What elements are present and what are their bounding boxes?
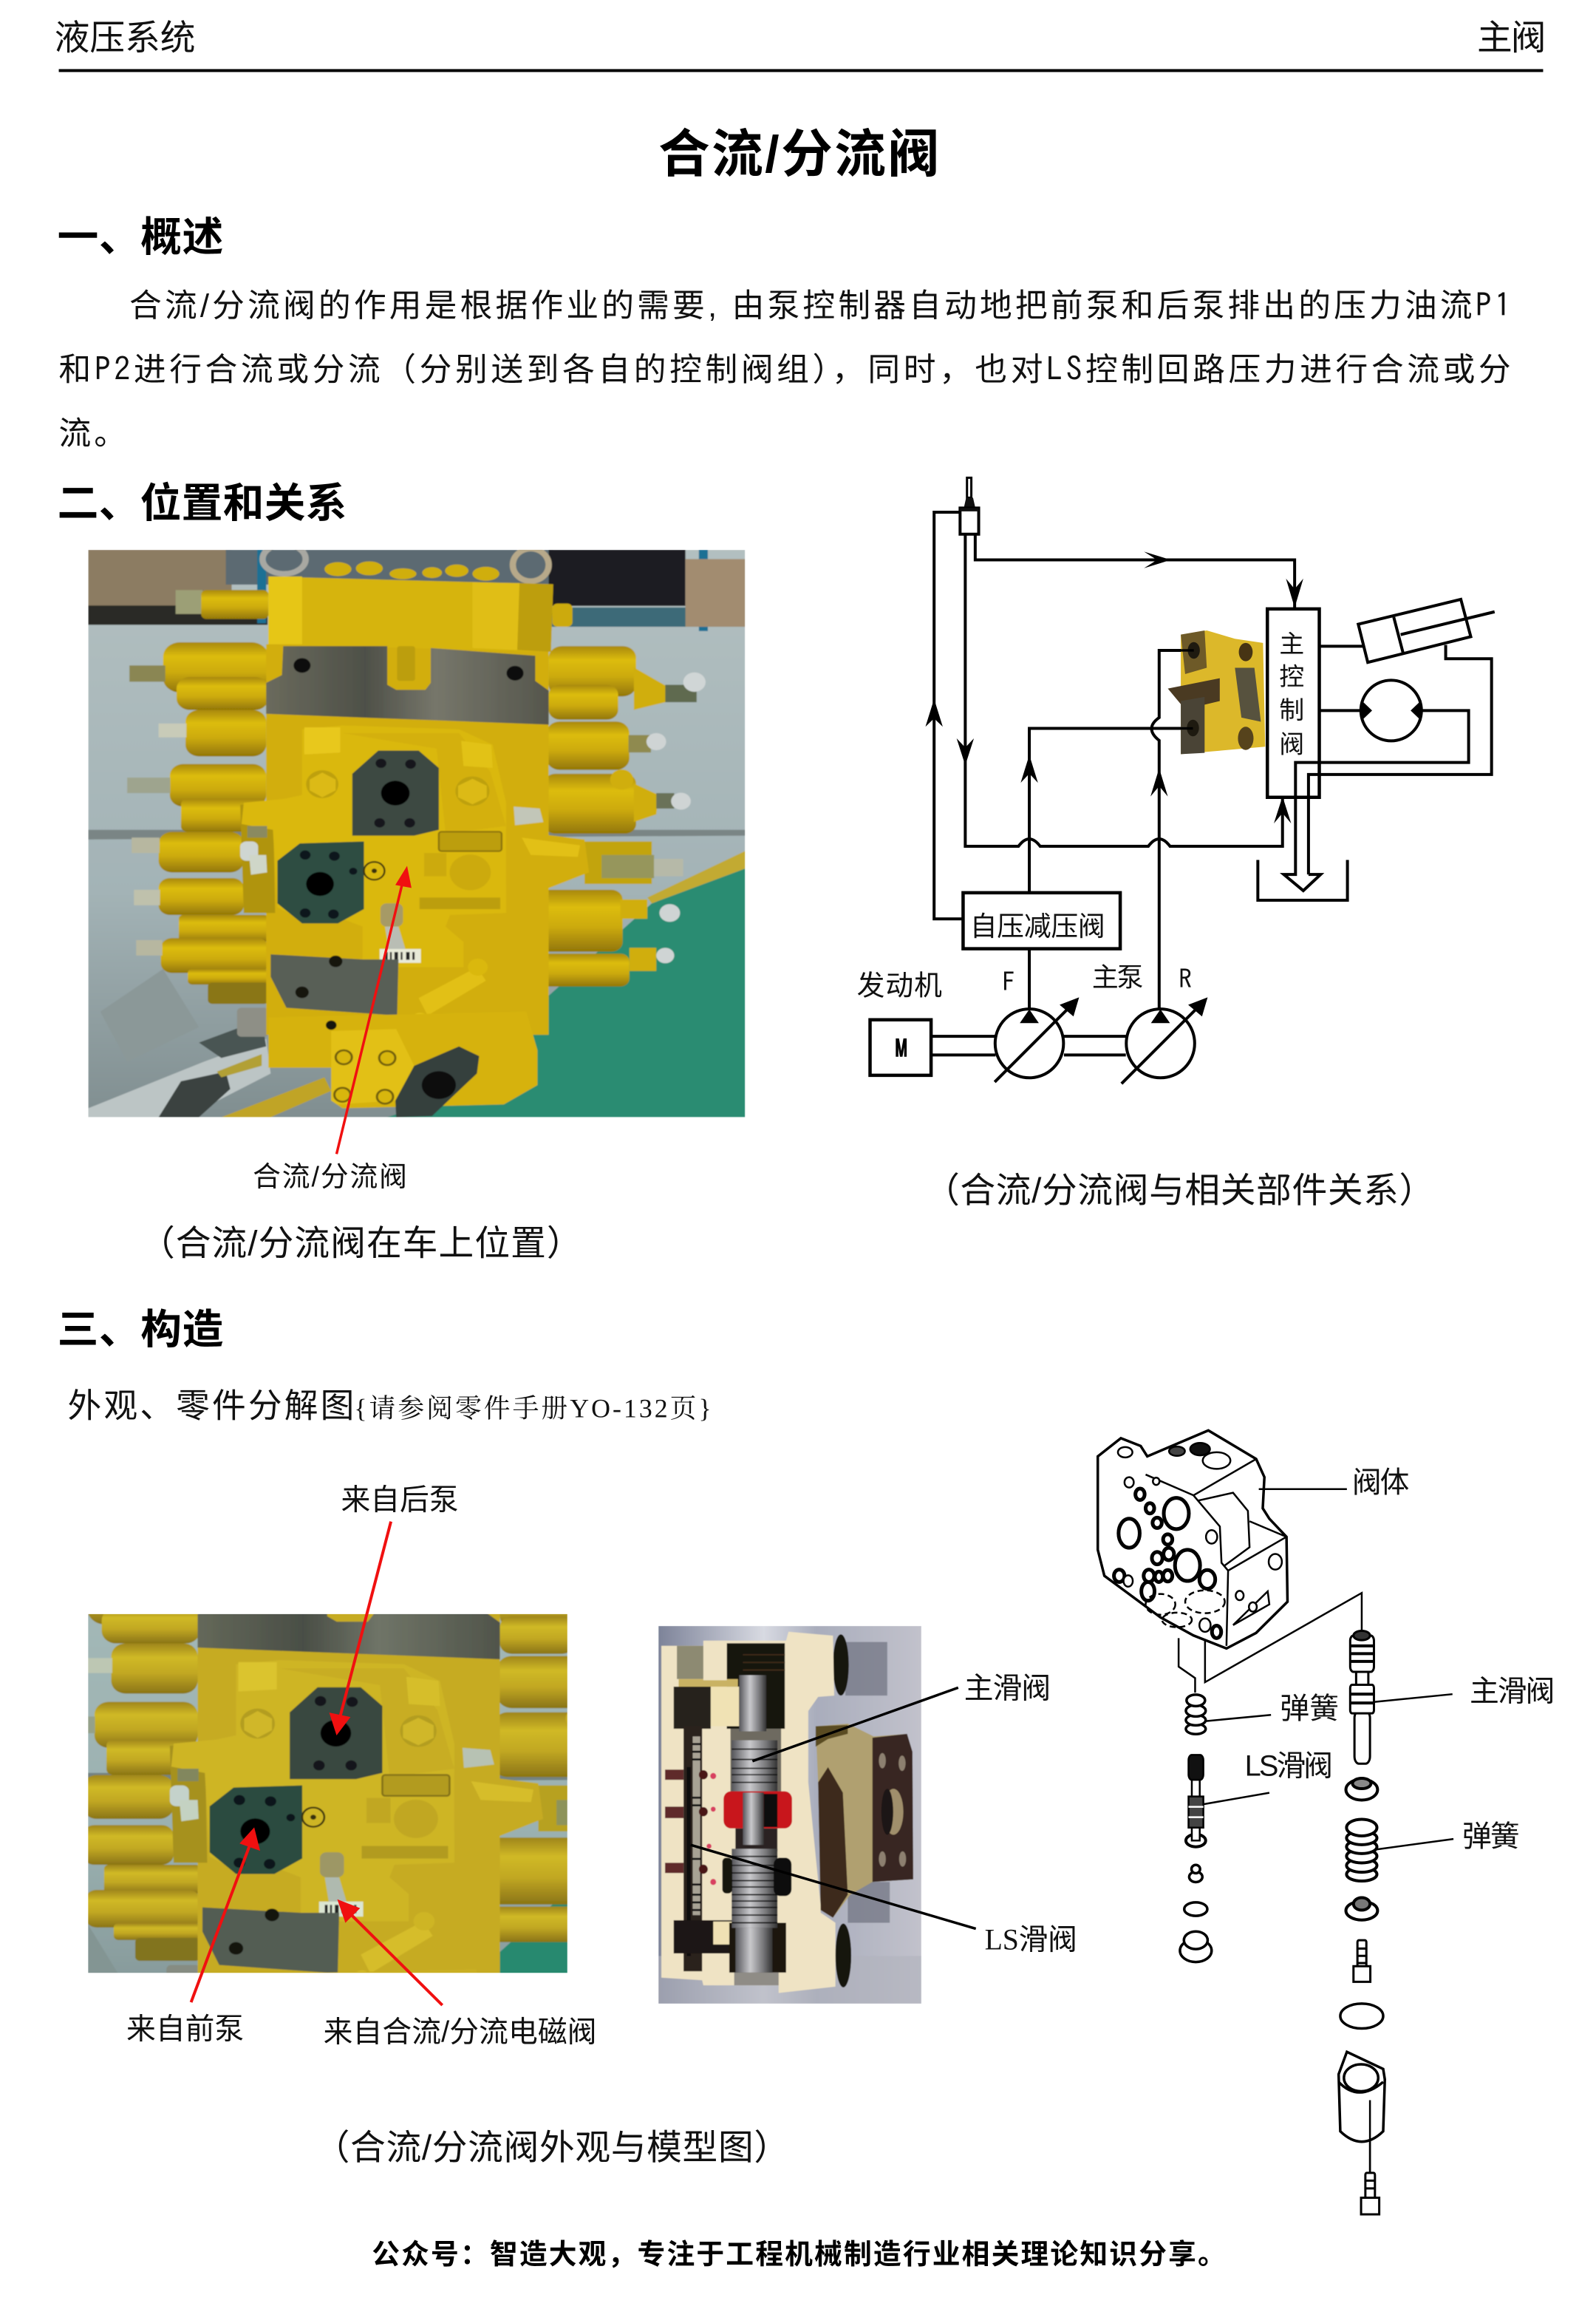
title: 合流/分流阀 <box>658 126 939 183</box>
icon: valve body <box>1098 1430 1287 1648</box>
text block: overview paragraph <box>59 288 1511 452</box>
labels: circuit diagram: 发动机 <box>857 971 942 1002</box>
part: LS spring <box>1186 1695 1206 1734</box>
exploded parts drawing <box>1098 1430 1453 2214</box>
icon: flow arrows <box>925 551 1303 823</box>
part: washers and main spring <box>1346 1778 1377 1920</box>
labels: circuit diagram <box>857 630 1304 1061</box>
leader lines: cutaway model <box>691 1687 976 1929</box>
part: LS spool <box>1186 1755 1206 1847</box>
page header <box>55 19 1546 72</box>
main control valve box <box>1267 609 1320 797</box>
heading: section three: 三、构造 <box>58 1307 223 1353</box>
footer note: 公众号：智造大观，专注于工程机械制造行业相关理论知识分享。 <box>372 2239 1226 2271</box>
text block: overview paragraph: 流。 <box>59 416 129 452</box>
icon: tank <box>1258 860 1348 900</box>
part: LS small fittings <box>1180 1865 1212 1962</box>
exploded axis lines <box>1179 1593 1370 2173</box>
caption: relation with components: （合流/分流阀与相关部件关系） <box>924 1171 1434 1211</box>
labels: circuit diagram: 制 <box>1279 697 1304 725</box>
labels: circuit diagram: R <box>1179 967 1192 993</box>
cavities <box>677 1646 703 1679</box>
labels: circuit diagram: 主泵 <box>1092 963 1143 993</box>
icon: joystick <box>960 477 979 534</box>
text block: overview paragraph: 和P2进行合流或分流（分别送到各自的控制阀组），同时，也对LS控制回路压力进行合流或分 <box>59 352 1511 388</box>
heading: section two: 二、位置和关系 <box>58 480 347 526</box>
arrow: red pointer to valve <box>336 866 412 1154</box>
part: end bolt <box>1361 2173 1380 2214</box>
labels: exploded parts: 主滑阀 <box>1470 1675 1555 1707</box>
label: valve name: 合流/分流阀 <box>253 1162 407 1193</box>
labels: exploded parts: 阀体 <box>1352 1466 1409 1499</box>
part: end cap <box>1339 2052 1385 2142</box>
labels: circuit diagram: 自压减压阀 <box>970 911 1105 942</box>
heading: section one: 一、概述 <box>58 214 223 260</box>
part: bolt and o-ring <box>1340 1940 1383 2029</box>
labels: cutaway model: 主滑阀 <box>964 1672 1051 1704</box>
arrows: red port pointers <box>191 1522 443 2005</box>
label: from solenoid valve: 来自合流/分流电磁阀 <box>324 2016 597 2049</box>
spool <box>739 1675 766 1731</box>
page header: 液压系统 <box>55 19 196 58</box>
icon: valve photo <box>1153 630 1265 754</box>
labels: circuit diagram: F <box>1002 970 1015 996</box>
labels: circuit diagram: 控 <box>1279 663 1304 691</box>
labels: circuit diagram: 阀 <box>1279 730 1304 758</box>
text block: overview paragraph: 合流/分流阀的作用是根据作业的需要, 由泵控制器自动地把前泵和后泵排出的压力油流P1 <box>129 288 1511 324</box>
pressure reducing valve box <box>963 893 1120 949</box>
labels: exploded parts: 弹簧 <box>1280 1693 1339 1725</box>
labels: circuit diagram: 主 <box>1279 630 1304 659</box>
motor box <box>870 1020 931 1075</box>
labels: circuit diagram: M <box>895 1036 907 1061</box>
caption: position on machine: （合流/分流阀在车上位置） <box>140 1225 582 1264</box>
icon: front pump <box>995 997 1079 1082</box>
labels: exploded parts <box>1245 1466 1555 1853</box>
photo: cutaway model <box>658 1626 921 2004</box>
photo: valve exterior close-up <box>88 1614 567 1973</box>
text block: parts manual note <box>67 1387 712 1424</box>
circuit diagram <box>870 477 1495 1084</box>
labels: exploded parts: LS滑阀 <box>1245 1750 1333 1783</box>
text block: parts manual note: {请参阅零件手册YO-132页} <box>354 1393 712 1423</box>
label: from front pump: 来自前泵 <box>126 2013 244 2046</box>
text block: parts manual note: 外观、零件分解图 <box>67 1387 354 1424</box>
leader lines <box>1204 1489 1453 1849</box>
icon: hydraulic cylinder <box>1320 599 1495 662</box>
icon: hydraulic motor <box>1361 680 1422 741</box>
labels: exploded parts: 弹簧 <box>1462 1820 1520 1853</box>
label: from rear pump: 来自后泵 <box>341 1484 459 1517</box>
photo: valve on machine <box>88 545 745 1118</box>
page header: 主阀 <box>1477 19 1546 58</box>
part: main spool <box>1350 1630 1374 1763</box>
icon: rear pump <box>1122 997 1207 1084</box>
labels: cutaway model: LS滑阀 <box>985 1923 1077 1956</box>
caption: exterior and model: （合流/分流阀外观与模型图） <box>315 2129 789 2168</box>
labels: cutaway model <box>964 1672 1077 1956</box>
